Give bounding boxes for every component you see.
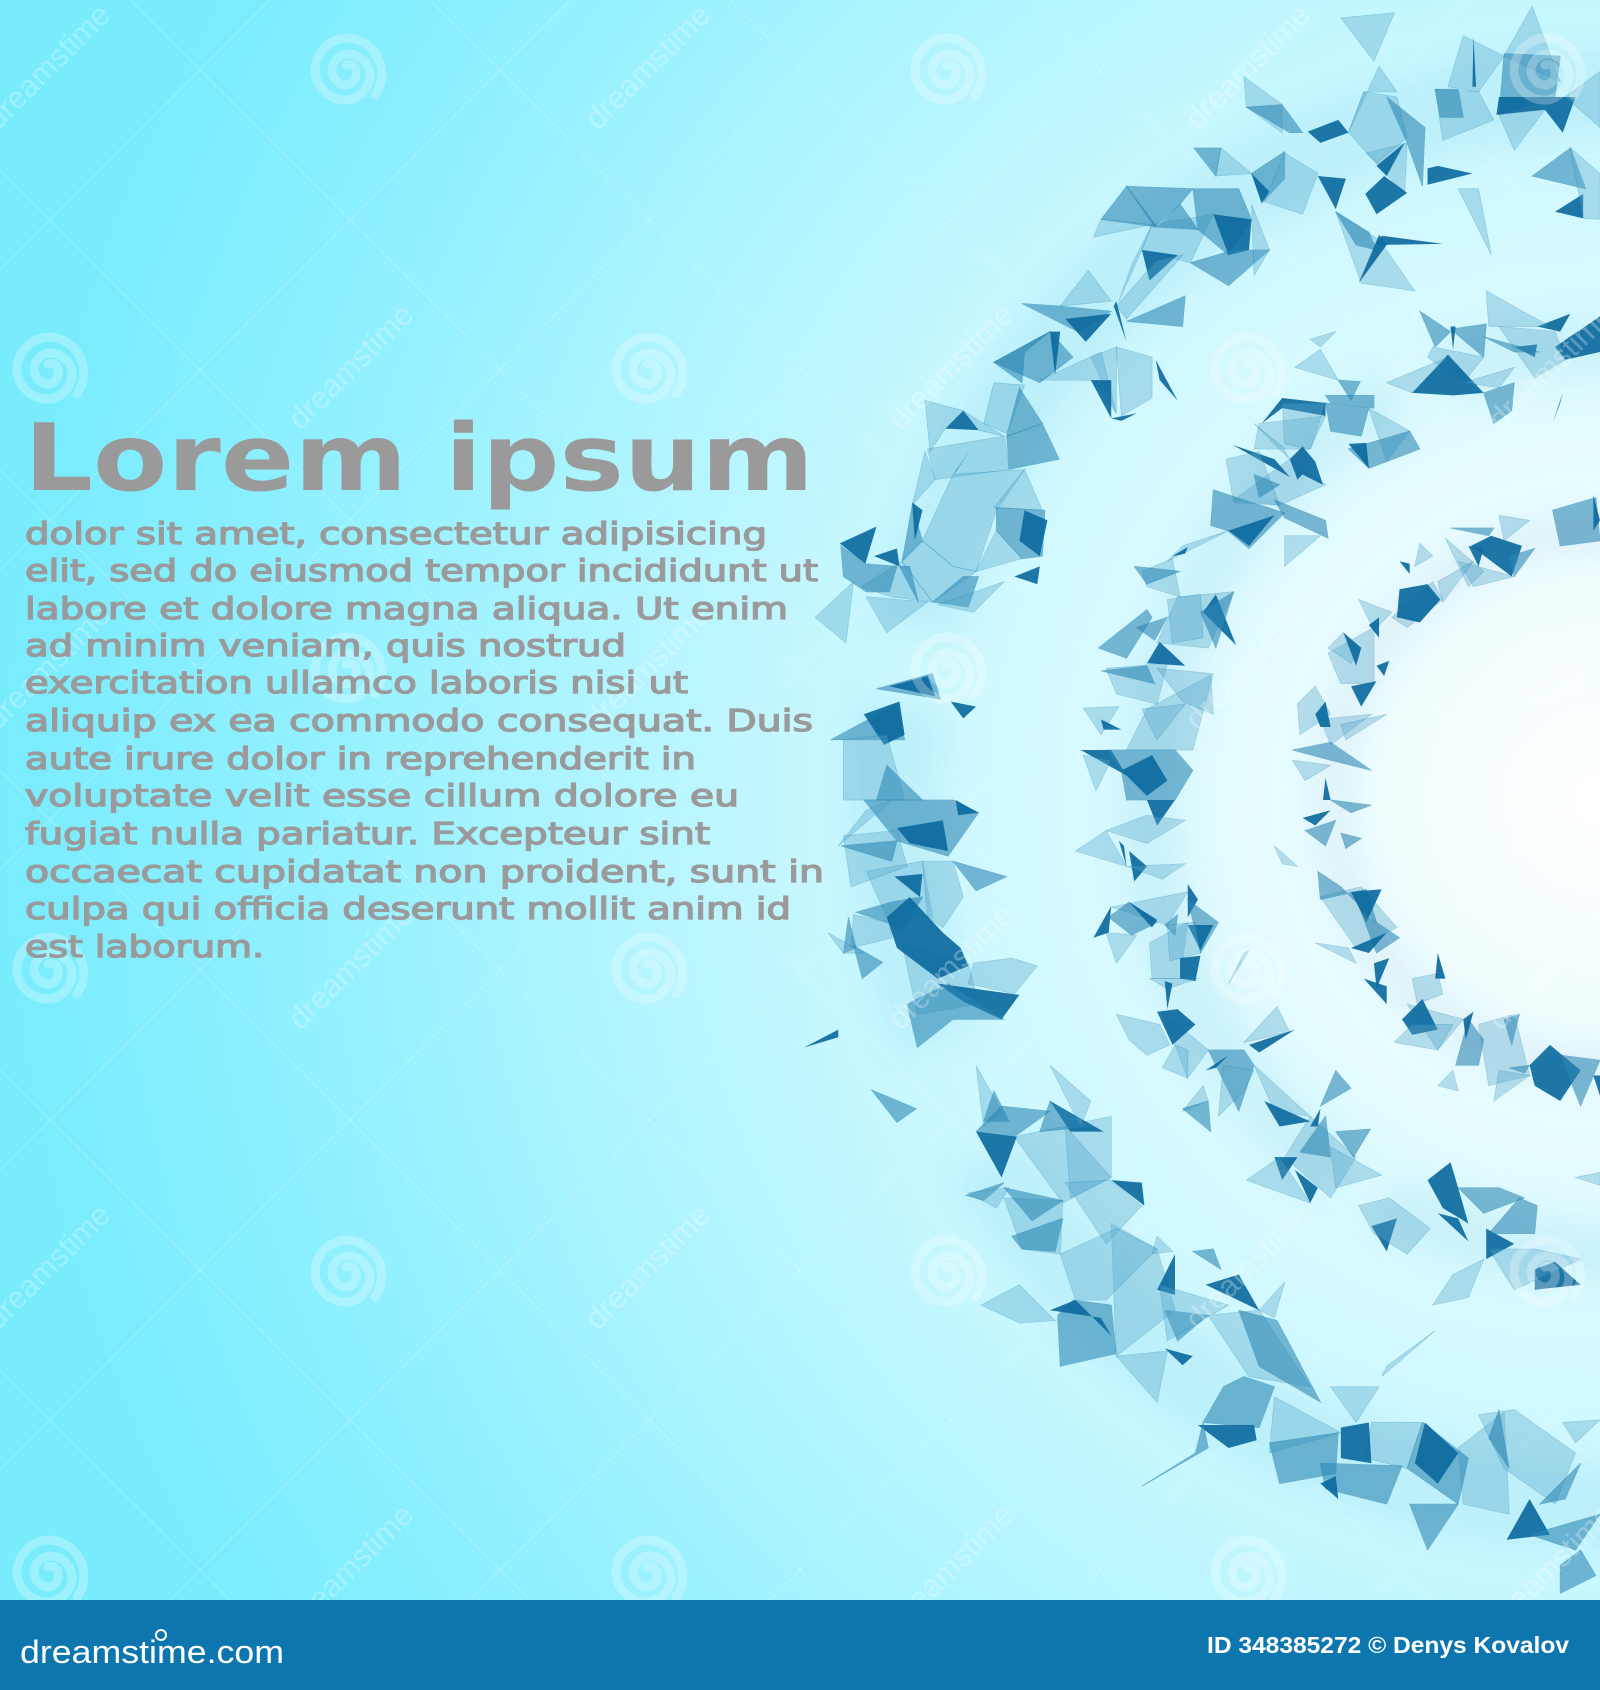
watermark text: dreamstime — [281, 297, 420, 436]
body text block: voluptate velit esse cillum dolore eu — [25, 779, 739, 814]
body text block: ad minim veniam, quis nostrud — [25, 629, 626, 664]
watermark text: dreamstime — [281, 1497, 420, 1636]
outer ring upper — [815, 6, 1600, 800]
soft ring haze bands — [895, 95, 1600, 1505]
polygon ring network: upper half — [815, 6, 1600, 800]
footer logo: dreamstime.com — [20, 1634, 284, 1670]
middle ring lower — [1076, 800, 1600, 1305]
middle ring upper — [1081, 291, 1600, 800]
inner ring upper — [1292, 495, 1600, 800]
polygon ring network: lower half — [804, 800, 1600, 1593]
body text block: culpa qui officia deserunt mollit anim id — [25, 892, 791, 927]
watermark text: dreamstime — [578, 597, 717, 736]
watermark text: dreamstime — [881, 297, 1020, 436]
inner ring lower — [1274, 800, 1600, 1106]
watermark text: dreamstime — [881, 1497, 1020, 1636]
watermark text: dreamstime — [1178, 0, 1317, 136]
watermark text: dreamstime — [1178, 1197, 1317, 1336]
footer banner — [0, 1600, 1600, 1690]
outer ring lower — [804, 800, 1600, 1593]
footer credit: ID 348385272 © Denys Kovalov — [1207, 1632, 1569, 1658]
watermark text: dreamstime — [881, 897, 1020, 1036]
body text block: fugiat nulla pariatur. Excepteur sint — [25, 817, 710, 852]
body text block: exercitation ullamco laboris nisi ut — [25, 666, 688, 701]
body text block — [25, 517, 824, 965]
watermark text: dreamstime — [578, 1197, 717, 1336]
body text block: aute irure dolor in reprehenderit in — [25, 742, 696, 777]
body text block: labore et dolore magna aliqua. Ut enim — [25, 592, 788, 627]
body text block: aliquip ex ea commodo consequat. Duis — [25, 704, 813, 739]
body text block: occaecat cupidatat non proident, sunt in — [25, 855, 824, 890]
body text block: est laborum. — [25, 930, 264, 965]
body text block: dolor sit amet, consectetur adipisicing — [25, 517, 767, 552]
watermark text: dreamstime — [281, 897, 420, 1036]
watermark text: dreamstime — [578, 0, 717, 136]
body text block: elit, sed do eiusmod tempor incididunt ut — [25, 554, 818, 589]
title: Lorem ipsum — [24, 404, 814, 512]
watermark text: dreamstime — [1178, 597, 1317, 736]
